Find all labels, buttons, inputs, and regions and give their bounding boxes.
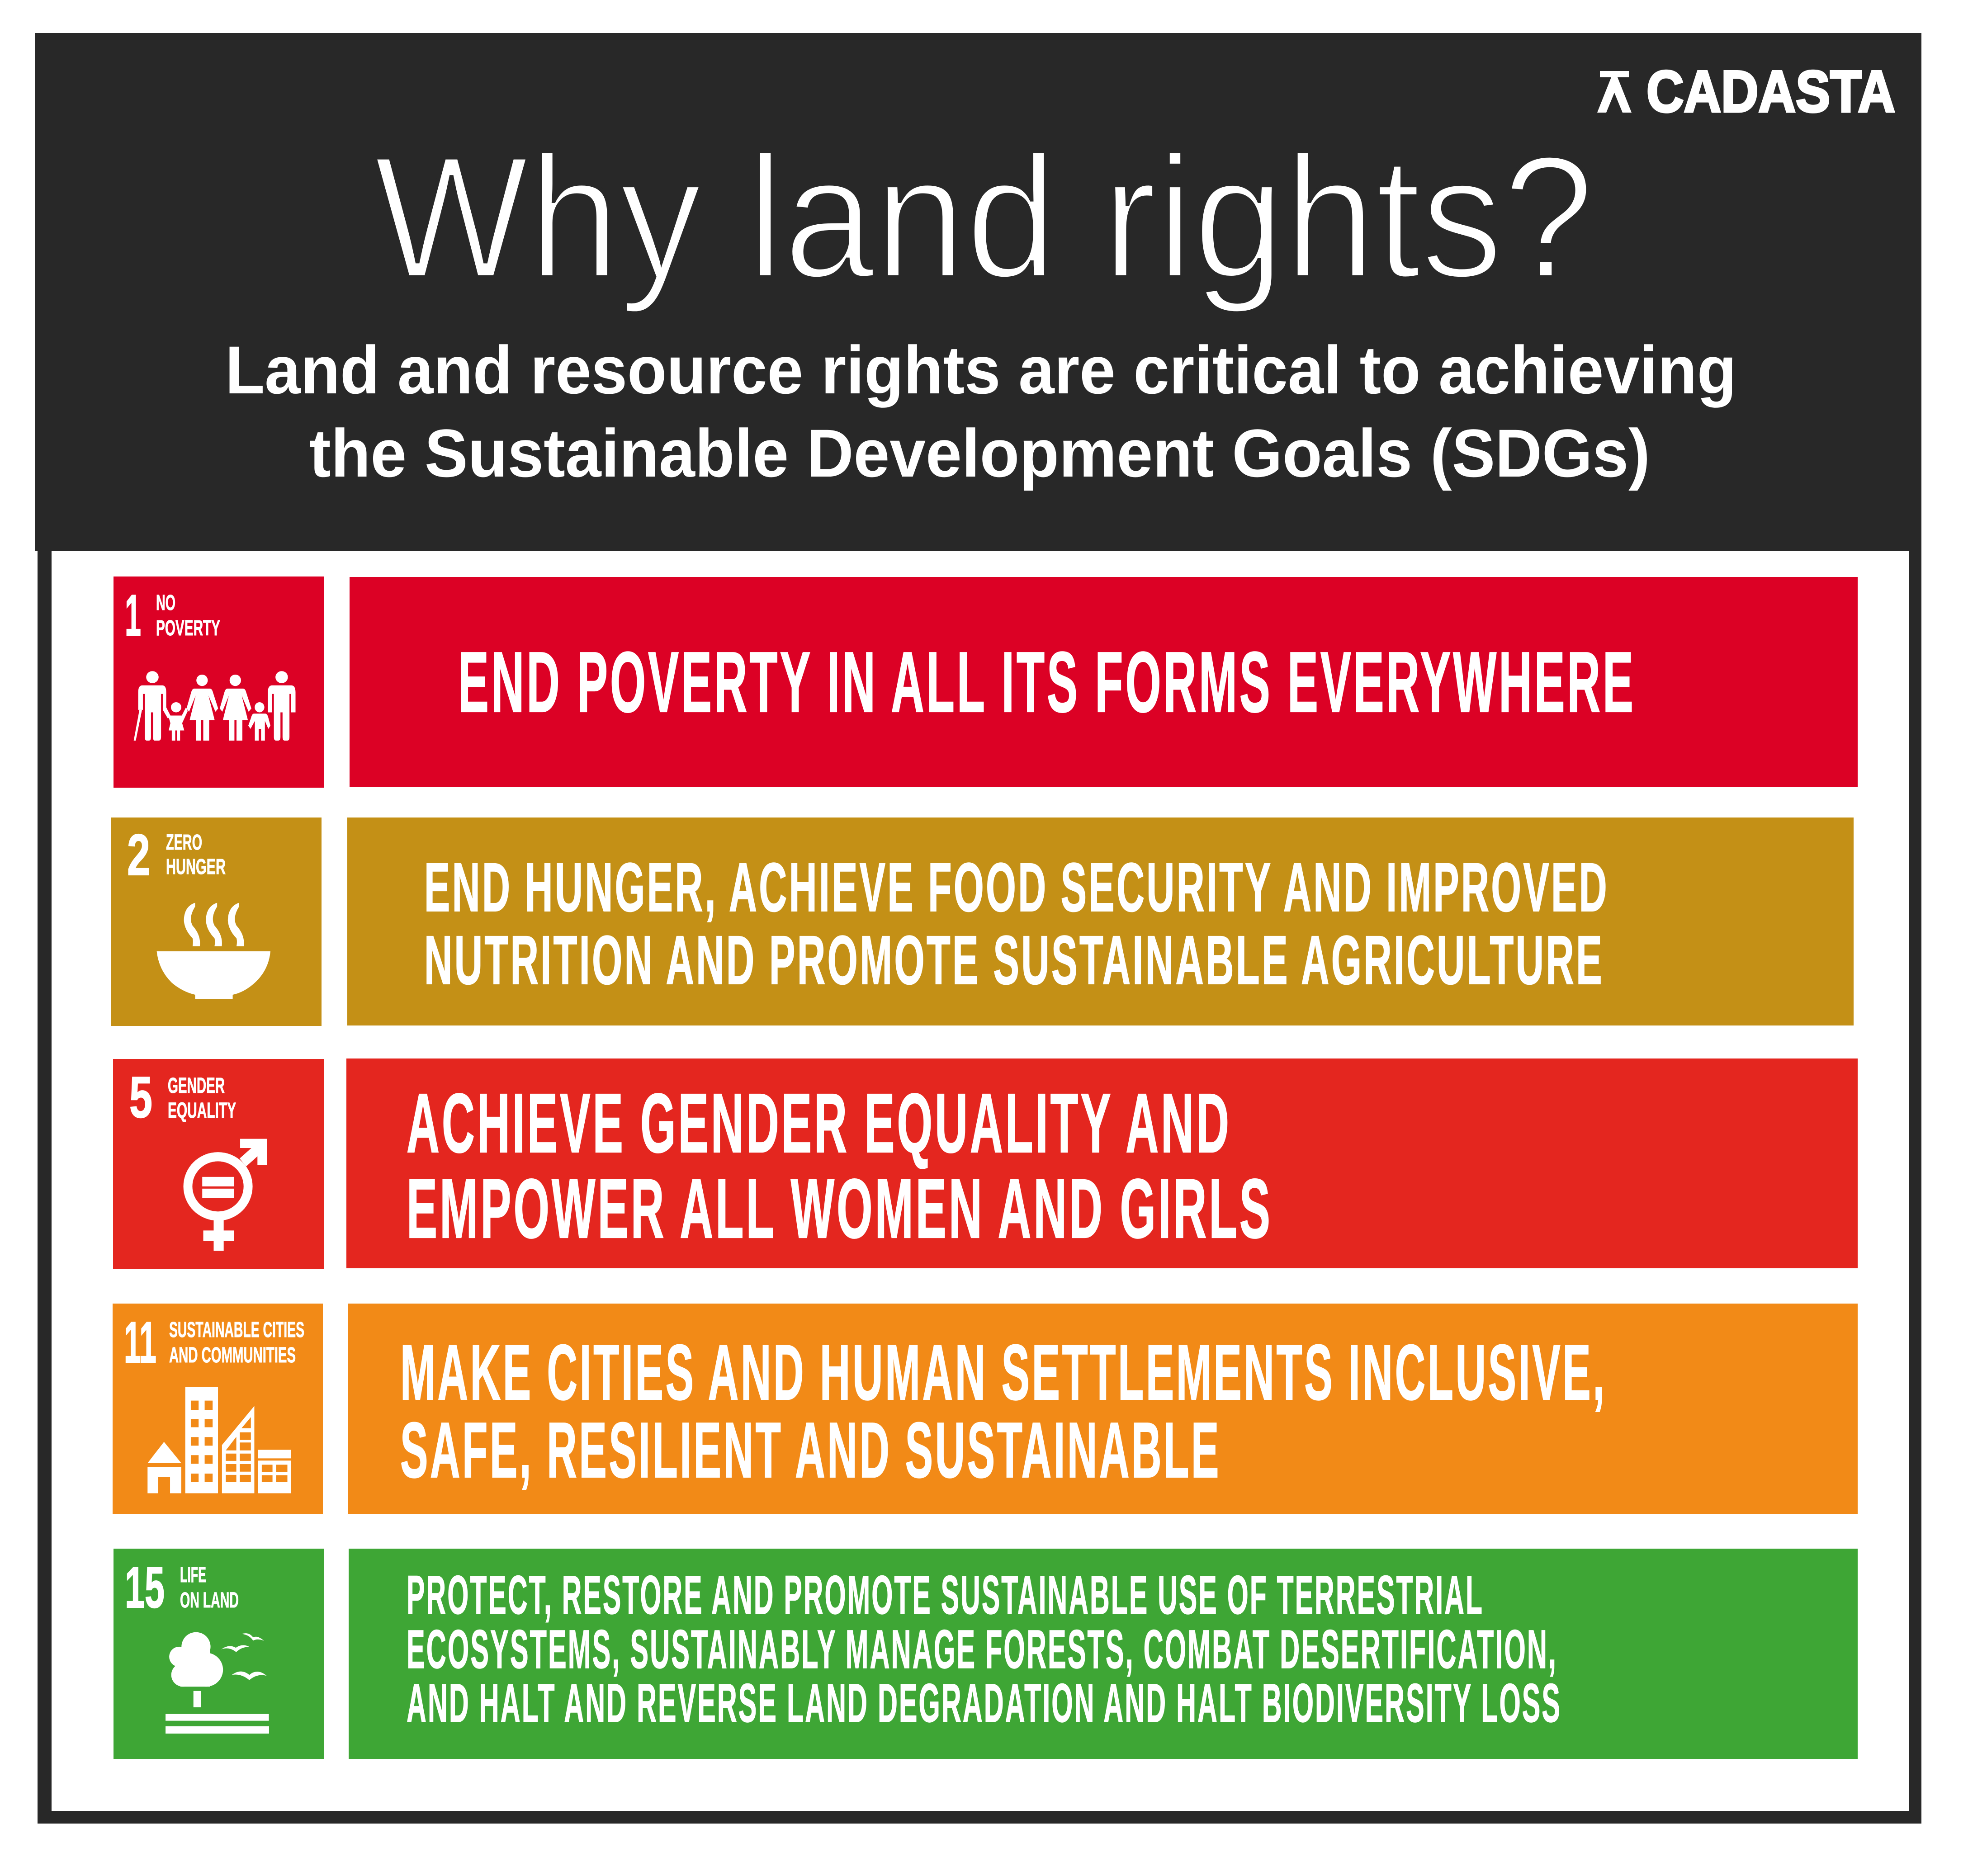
icon: gender symbol	[184, 1139, 267, 1251]
tile label	[169, 1318, 304, 1367]
tile number: 2	[127, 822, 150, 888]
tile label	[180, 1563, 239, 1612]
tile label: EQUALITY	[168, 1099, 236, 1123]
tile number: 15	[125, 1555, 165, 1620]
icon: tree and birds	[166, 1632, 269, 1734]
tile label: ON LAND	[180, 1588, 239, 1612]
panel: goal 2 zero hunger	[111, 818, 1854, 1026]
bar: goal 1 statement	[350, 577, 1858, 787]
subtitle: Land and resource rights are critical to achieving	[225, 332, 1736, 408]
tile label: NO	[156, 591, 175, 615]
subtitle	[225, 332, 1736, 491]
tile label: HUNGER	[166, 855, 226, 879]
tile: SDG 2	[111, 818, 322, 1026]
panel: goal 1 no poverty	[114, 577, 1858, 788]
title: Why land rights?	[374, 119, 1594, 315]
tile label: ZERO	[166, 831, 202, 855]
bar: goal 15 statement	[349, 1549, 1858, 1759]
frame around goals panel	[38, 543, 1921, 1824]
tile label: LIFE	[180, 1563, 206, 1587]
tile: SDG 5	[113, 1059, 324, 1269]
tile: SDG 1	[114, 577, 324, 788]
tile label	[156, 591, 220, 640]
tile label: SUSTAINABLE CITIES	[169, 1318, 304, 1342]
panel: goal 15 life on land	[114, 1549, 1858, 1759]
tile label: AND COMMUNITIES	[169, 1343, 296, 1367]
tile number: 11	[124, 1310, 156, 1375]
tile number: 1	[125, 583, 141, 648]
tile: SDG 11	[113, 1304, 323, 1514]
icon: tripod	[1597, 71, 1632, 113]
tile label: POVERTY	[156, 616, 220, 640]
tile label	[168, 1074, 236, 1123]
bar: goal 5 statement	[346, 1058, 1858, 1268]
tile label: GENDER	[168, 1074, 225, 1098]
bar: goal 5 statement: ACHIEVE GENDER EQUALITY AND	[407, 1077, 1231, 1170]
panel: goal 11 sustainable cities	[113, 1304, 1858, 1514]
tile: SDG 15	[114, 1549, 324, 1759]
icon: bowl with steam	[157, 903, 270, 999]
icon: family	[134, 671, 295, 741]
tile number: 5	[129, 1065, 152, 1130]
bar: goal 11 statement: SAFE, RESILIENT AND SUSTAINABLE	[400, 1406, 1221, 1494]
bar: goal 5 statement: EMPOWER ALL WOMEN AND GIRLS	[407, 1162, 1273, 1256]
panel: goal 5 gender equality	[113, 1058, 1858, 1269]
tile label	[166, 831, 226, 879]
icon: city buildings	[147, 1387, 291, 1493]
subtitle: the Sustainable Development Goals (SDGs)	[309, 415, 1650, 491]
bar: goal 2 statement	[347, 818, 1854, 1025]
logo wordmark: CADASTA	[1646, 58, 1895, 124]
header panel	[35, 33, 1921, 551]
logo: Cadasta	[1597, 58, 1895, 124]
bar: goal 11 statement	[348, 1304, 1858, 1514]
